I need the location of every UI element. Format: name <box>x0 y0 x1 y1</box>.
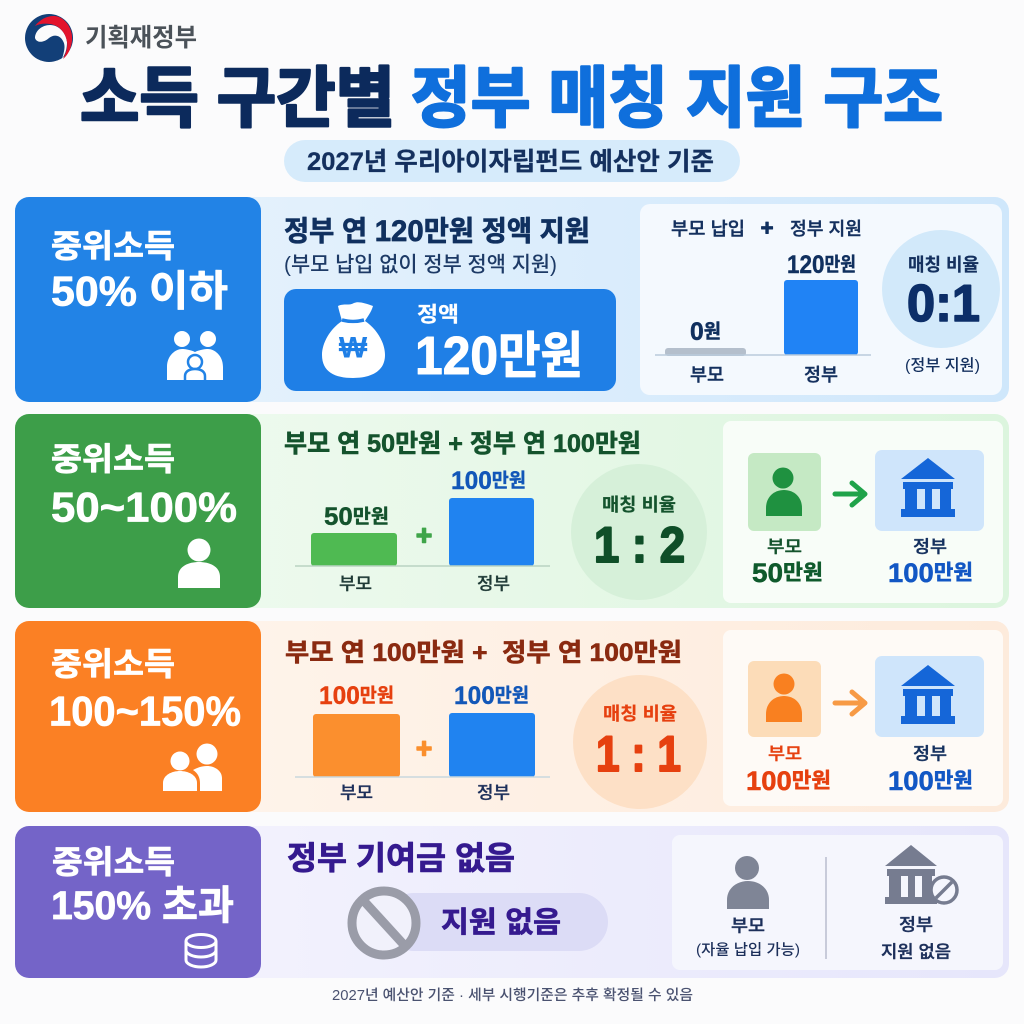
icon: government <box>875 656 984 737</box>
bar chart: 100만원 <box>451 467 526 495</box>
income band label: 중위소득 <box>52 844 175 880</box>
icon: prohibition <box>352 891 416 955</box>
icon: coins <box>186 934 216 967</box>
title <box>80 61 943 135</box>
ministry name: 기획재정부 <box>85 24 197 52</box>
footer note: 2027년 예산안 기준 · 세부 시행기준은 추후 확정될 수 있음 <box>332 987 693 1004</box>
heading: 정부 기여금 없음 <box>287 840 515 876</box>
flow panel: 정부 <box>913 538 947 556</box>
income band label: 중위소득 <box>51 646 175 682</box>
bar chart <box>295 682 550 802</box>
comparison panel: 정부 지원 <box>790 219 862 239</box>
heading: 부모 연 100만원 + 정부 연 100만원 <box>285 639 682 667</box>
bar chart: 정부 <box>477 574 510 594</box>
income band label: 중위소득 <box>51 441 175 477</box>
comparison panel <box>640 204 1002 395</box>
bar chart <box>655 251 871 385</box>
no support badge: 지원 없음 <box>441 906 561 939</box>
icon: government blocked <box>885 845 957 904</box>
icon: money bag <box>322 302 385 378</box>
bar chart: + <box>416 732 432 764</box>
subtitle pill <box>284 140 740 182</box>
comparison panel: + <box>761 216 773 240</box>
note: (부모 납입 없이 정부 정액 지원) <box>284 254 557 276</box>
flow panel: 부모 <box>767 538 802 556</box>
flow panel: 100만원 <box>746 766 831 796</box>
bar chart: 50만원 <box>324 503 389 531</box>
income band label: 중위소득 <box>51 228 175 264</box>
panel: income over 150% <box>15 826 1009 978</box>
icon: parent <box>727 856 769 909</box>
status panel: 지원 없음 <box>881 942 951 962</box>
title: 소득 구간별 <box>80 61 395 135</box>
heading: 부모 연 50만원 + 정부 연 100만원 <box>284 430 641 458</box>
matching ratio <box>571 464 707 600</box>
income band label: 50~100% <box>51 484 237 530</box>
subtitle pill: 2027년 우리아이자립펀드 예산안 기준 <box>307 148 714 176</box>
matching ratio: (정부 지원) <box>905 356 980 374</box>
bar chart: + <box>416 520 432 550</box>
flow panel <box>723 421 1003 603</box>
heading: 정부 연 120만원 정액 지원 <box>284 214 590 248</box>
status panel: (자율 납입 가능) <box>696 942 800 958</box>
matching ratio: 매칭 비율 <box>602 495 676 515</box>
matching ratio: 1 : 2 <box>594 517 685 573</box>
matching ratio <box>882 230 1000 374</box>
flow panel: 50만원 <box>752 558 823 588</box>
panel: income 100~150% <box>15 621 1009 812</box>
icon: government <box>875 450 984 531</box>
bar chart: 부모 <box>690 365 724 385</box>
comparison panel: 부모 납입 <box>671 219 745 239</box>
matching ratio: 1 : 1 <box>596 726 681 782</box>
matching ratio <box>573 675 707 809</box>
bar chart: 부모 <box>340 784 373 802</box>
flow panel: 100만원 <box>888 766 973 796</box>
ministry logo <box>25 14 73 62</box>
status panel: 정부 <box>899 916 933 934</box>
bar chart: 100만원 <box>454 682 529 710</box>
bar chart: 부모 <box>339 574 372 594</box>
icon: money bag: ₩ <box>339 332 368 364</box>
bar chart: 정부 <box>804 365 838 385</box>
bar chart: 120만원 <box>787 251 856 279</box>
panel: income 50~100% <box>15 414 1009 608</box>
flow panel: 정부 <box>913 744 947 764</box>
income band label: 150% 초과 <box>51 884 234 928</box>
matching ratio: 0:1 <box>907 275 980 333</box>
fixed amount box: 정액 <box>417 304 459 326</box>
income band label <box>15 414 261 608</box>
title: 정부 매칭 지원 구조 <box>411 61 943 135</box>
bar chart <box>295 467 550 594</box>
income band label <box>15 197 261 402</box>
bar chart: 0원 <box>690 318 721 346</box>
icon: parent <box>748 661 821 737</box>
flow panel: 100만원 <box>888 558 973 588</box>
status panel: 부모 <box>731 916 765 936</box>
bar chart: 정부 <box>477 784 510 802</box>
flow panel <box>723 630 1003 806</box>
income band label <box>15 621 261 812</box>
panel: income under 50% <box>15 197 1009 402</box>
status panel <box>672 835 1003 970</box>
bar chart: 100만원 <box>319 682 394 710</box>
arrow <box>835 692 865 714</box>
income band label: 100~150% <box>49 688 241 734</box>
arrow <box>835 483 865 505</box>
icon: parent <box>748 453 821 531</box>
fixed amount box <box>284 289 616 391</box>
income band label: 50% 이하 <box>51 268 228 314</box>
matching ratio: 매칭 비율 <box>908 255 979 275</box>
fixed amount box: 120만원 <box>415 326 583 386</box>
income band label <box>15 826 261 978</box>
matching ratio: 매칭 비율 <box>603 704 677 724</box>
no support badge <box>352 891 608 955</box>
flow panel: 부모 <box>768 744 802 764</box>
